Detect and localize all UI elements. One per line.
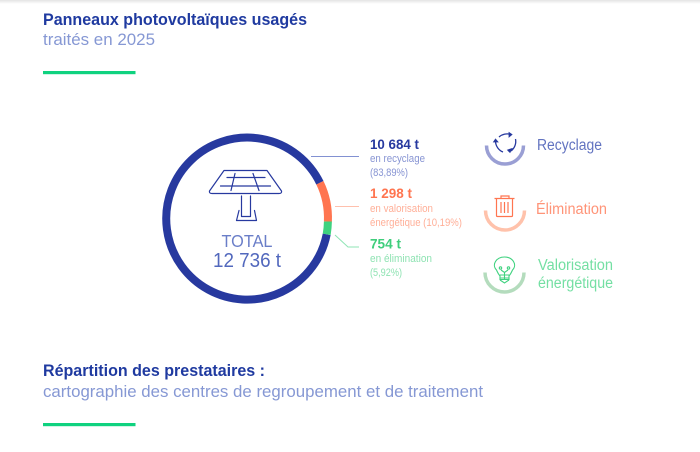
center total label: 12 736 t — [213, 250, 281, 272]
center total label: TOTAL — [222, 231, 273, 251]
leader lines — [311, 156, 359, 247]
accent bar: bottom heading — [43, 423, 136, 426]
title: photovoltaic panels — [43, 11, 307, 49]
callout: recycling value: 10 684 t — [370, 137, 419, 152]
callout: energy recovery value: énergétique (10,19%) — [370, 217, 462, 229]
title: photovoltaic panels: traités en 2025 — [43, 30, 155, 49]
legend: recycling: Recyclage — [537, 137, 602, 154]
legend: disposal: Élimination — [536, 201, 607, 218]
segment: recycling — [166, 138, 327, 300]
heading: provider distribution — [43, 361, 483, 401]
callout: disposal value — [370, 236, 432, 279]
title: photovoltaic panels: Panneaux photovoltaïques usagés — [43, 11, 307, 29]
accent bar: top heading — [43, 71, 136, 74]
icon: light bulb — [485, 257, 524, 292]
donut chart: total treated tonnage — [166, 138, 328, 300]
callout: recycling value: (83,89%) — [370, 167, 408, 179]
callout: energy recovery value: en valorisation — [370, 203, 433, 215]
icon: trash bin — [486, 196, 524, 230]
segment: disposal — [327, 222, 328, 234]
callout: disposal value: en élimination — [370, 253, 432, 265]
legend: recycling — [486, 132, 602, 164]
callout: recycling value — [370, 137, 425, 179]
legend: energy recovery: Valorisation — [538, 257, 613, 274]
callout: disposal value: 754 t — [370, 236, 401, 252]
center total label — [213, 231, 281, 272]
callout: recycling value: en recyclage — [370, 153, 425, 165]
legend: energy recovery: énergétique — [538, 275, 613, 292]
callout: energy recovery value — [370, 186, 462, 229]
icon: recycling arrows — [486, 132, 524, 164]
callout: energy recovery value: 1 298 t — [370, 186, 413, 201]
heading: provider distribution: Répartition des prestataires : — [43, 361, 265, 380]
callout: disposal value: (5,92%) — [370, 267, 402, 279]
segment: energy recovery — [320, 183, 328, 222]
heading: provider distribution: cartographie des centres de regroupement et de traitement — [43, 382, 483, 401]
legend: disposal — [486, 196, 607, 230]
icon: solar panel — [209, 170, 282, 220]
legend: energy recovery — [485, 257, 613, 292]
